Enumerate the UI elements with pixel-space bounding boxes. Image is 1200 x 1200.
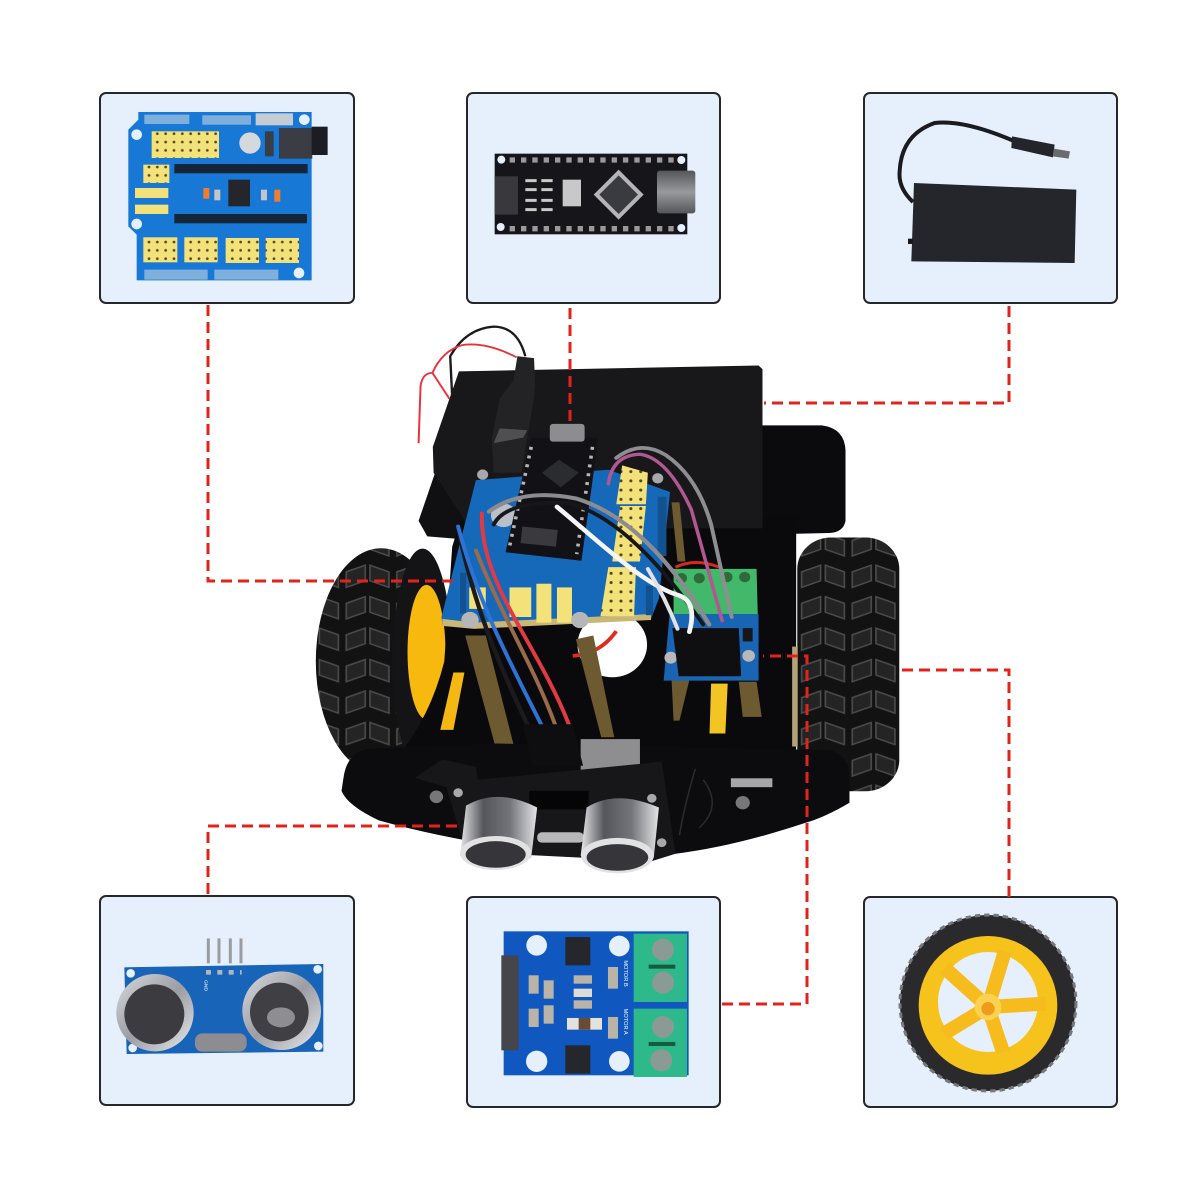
nano board on car [506,424,598,561]
panel content: expansion shield [128,112,328,280]
connector: battery to car [764,306,1009,403]
dupont connector [522,724,583,766]
front plate [342,739,849,855]
connector: wheel to car [900,670,1009,897]
right wheel [797,537,899,791]
dc jack and power wires [419,327,535,473]
connector: ultrasonic to car [208,826,460,894]
connector: shield to car [208,305,455,581]
motor driver on car [664,562,759,681]
jumper wires [458,448,732,724]
panel content: wheel [900,915,1076,1091]
panel content: nano board [495,154,695,234]
panel content: motor driver [501,931,689,1077]
expansion shield on car [442,465,670,629]
standoffs [465,502,762,752]
ultrasonic mount and sensors [415,759,676,873]
robot car [316,327,899,873]
panel frames [100,93,1117,1107]
driver label a: MOTOR A [622,1009,628,1035]
driver labels: MOTOR B [622,960,628,987]
panel content: ultrasonic sensor [116,938,323,1054]
chassis centre [397,517,798,758]
left sensor [460,797,537,870]
rear plate left [419,469,482,540]
left wheel [316,548,452,775]
battery box [433,365,763,528]
connector: nano to car [568,308,572,422]
right rear plate [763,425,846,754]
connector: driver to car [722,656,807,1004]
right sensor [581,798,659,873]
sensor labels: GND [202,980,208,991]
panel content: battery box [899,123,1076,263]
